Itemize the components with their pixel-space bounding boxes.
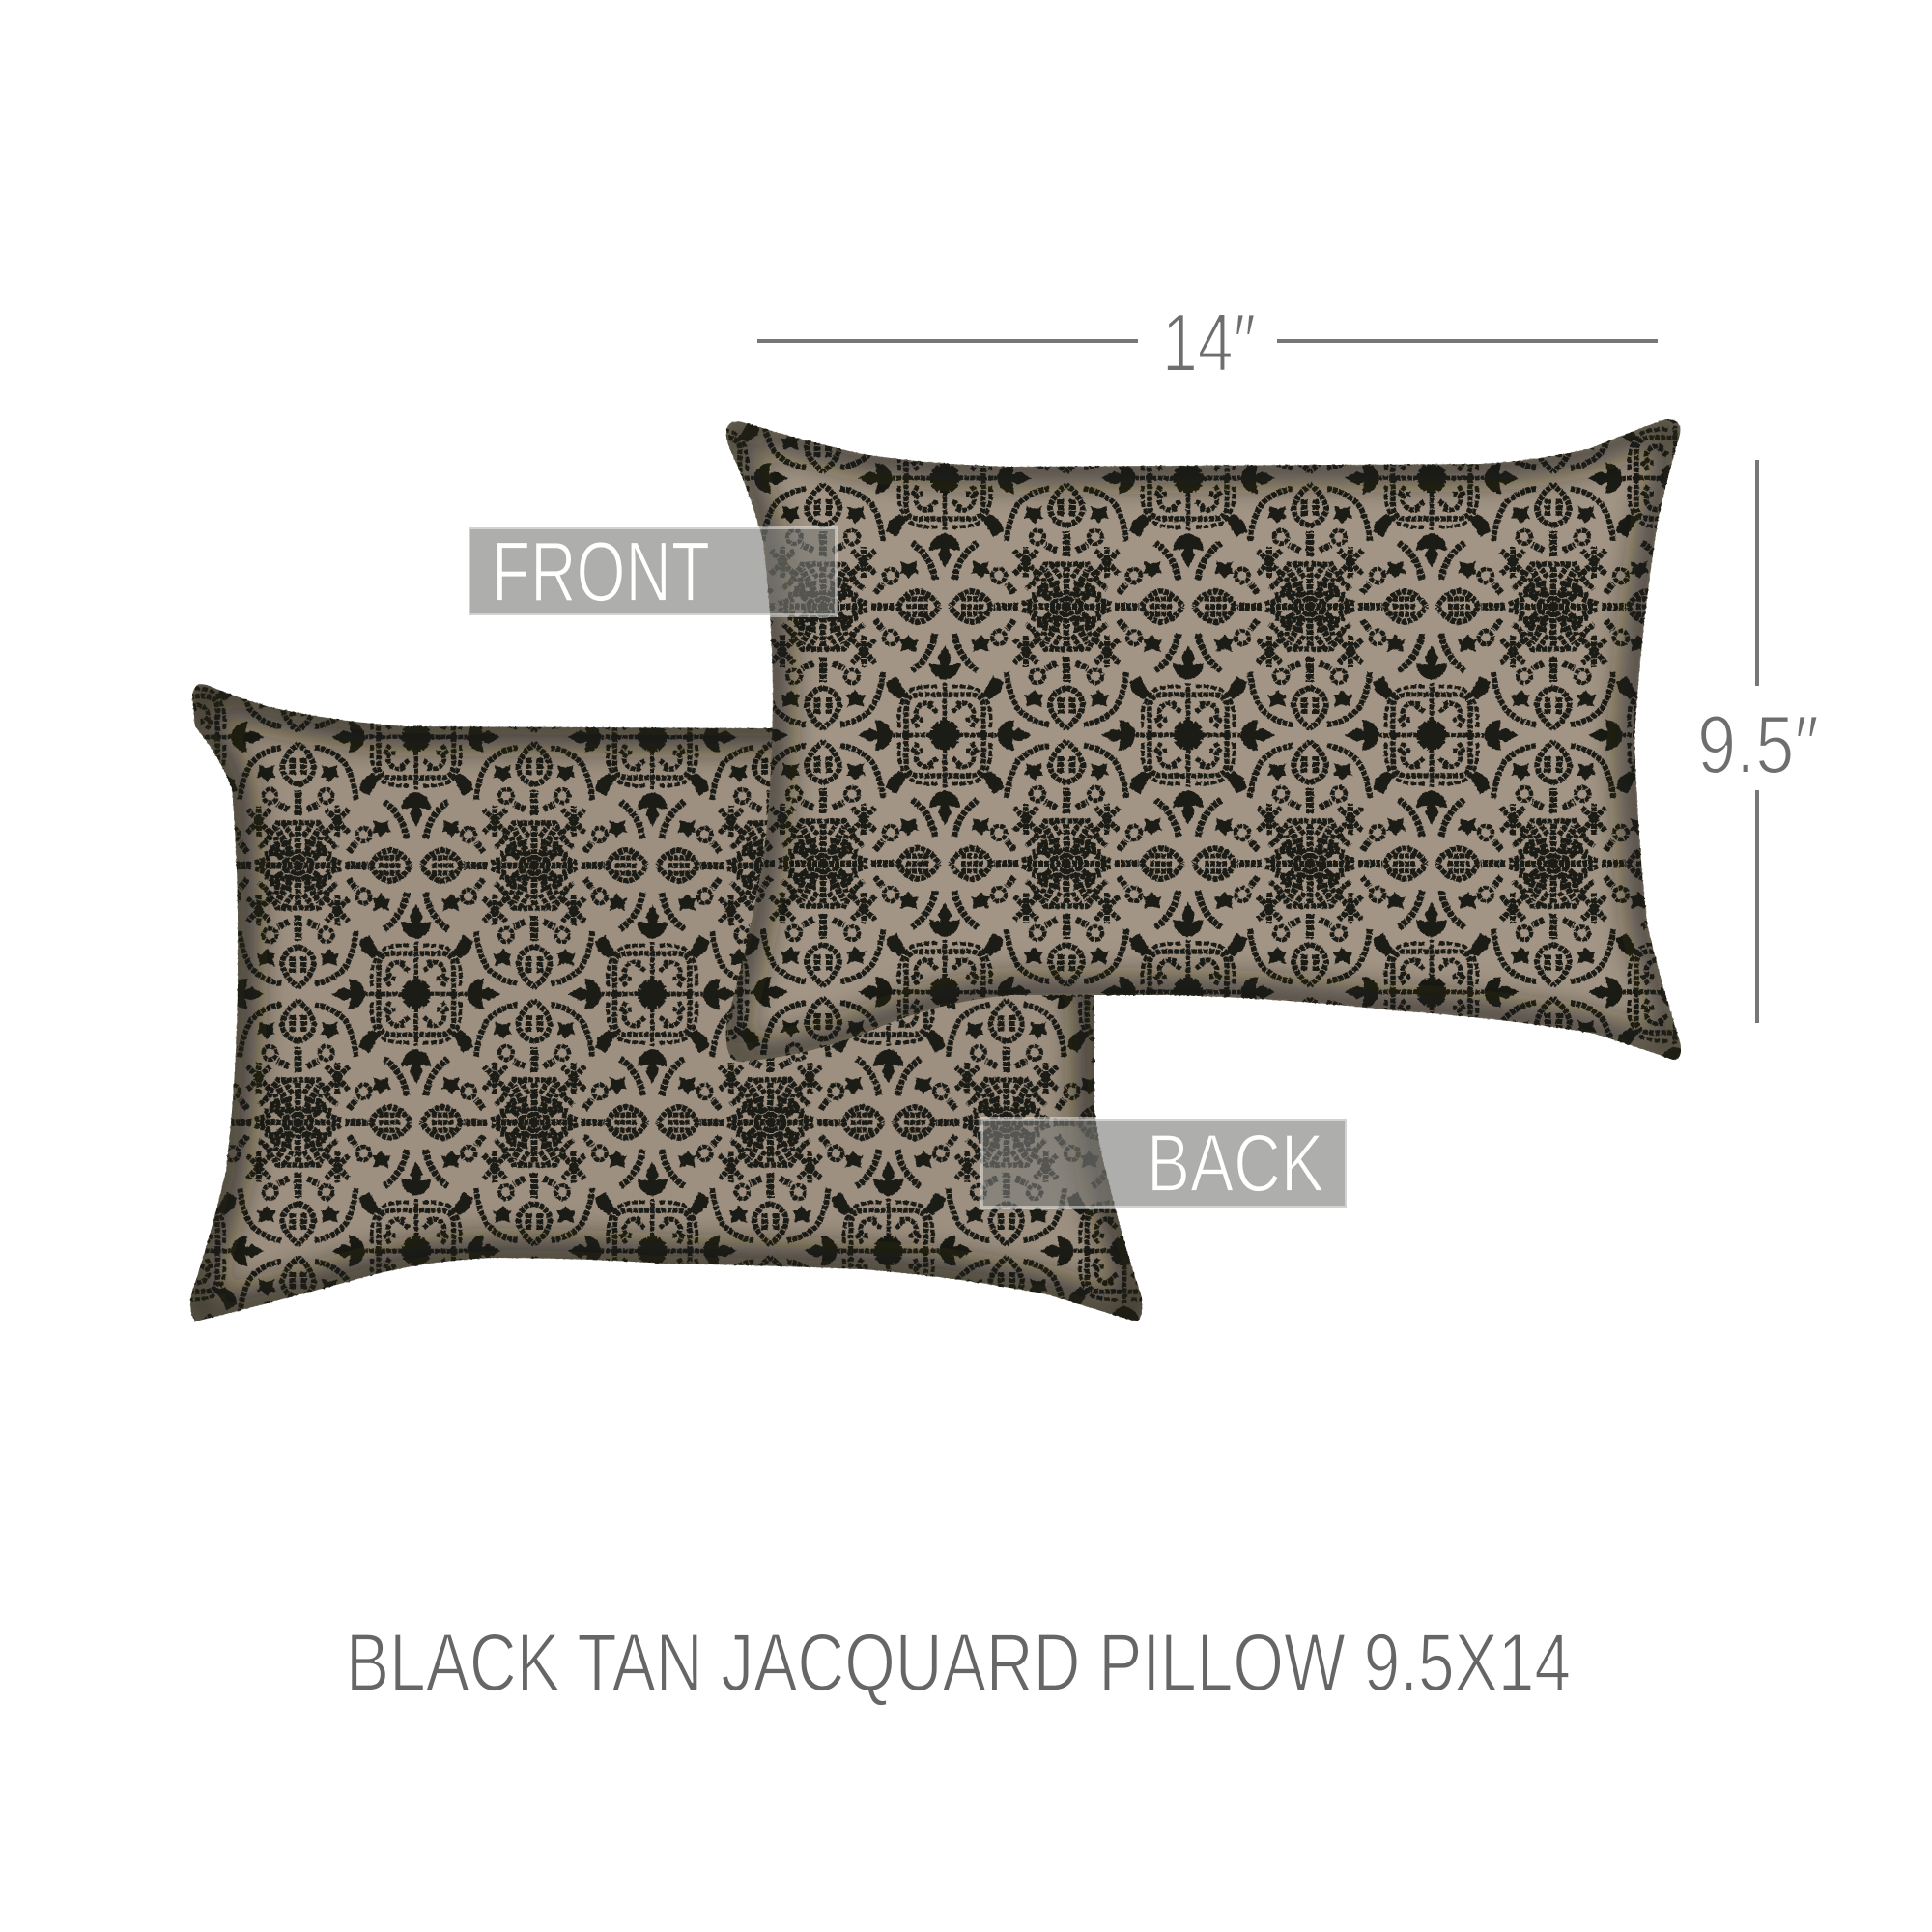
back pillow bbox=[190, 684, 1142, 1321]
label: FRONT: FRONT bbox=[492, 524, 710, 619]
dimension: height 9.5 inches bbox=[1697, 460, 1819, 1023]
label: BACK: BACK bbox=[1147, 1118, 1324, 1208]
front pillow bbox=[726, 419, 1681, 1062]
title: BLACK TAN JACQUARD PILLOW 9.5X14 bbox=[346, 1617, 1571, 1708]
dimension: width 14 inches bbox=[757, 298, 1658, 389]
dimension: height 9.5 inches: 9.5″ bbox=[1697, 699, 1819, 791]
label: BACK bbox=[981, 1118, 1347, 1208]
dimension: width 14 inches: 14″ bbox=[1162, 298, 1256, 389]
